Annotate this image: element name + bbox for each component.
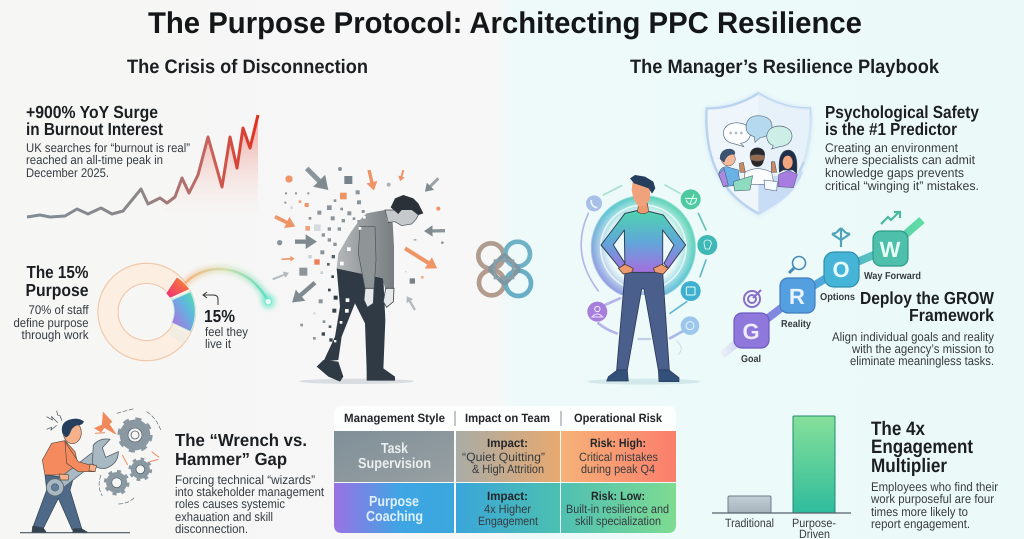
wrench description: disconnection. — [175, 522, 248, 536]
row: purpose coaching: Engagement — [478, 514, 539, 528]
burnout heading: in Burnout Interest — [26, 119, 163, 139]
figure shoes — [607, 370, 679, 382]
crumbling fragments over shoulders — [345, 209, 374, 234]
bar: traditional — [728, 496, 771, 513]
speech bubbles — [723, 116, 792, 149]
GROW description: Align individual goals and reality — [832, 330, 995, 344]
icon: central interlocking knot — [478, 242, 531, 296]
figure front arm — [358, 227, 376, 288]
burnout description: UK searches for “burnout is real” — [26, 141, 190, 155]
growth ribbon — [722, 220, 922, 355]
step: O options: O — [832, 257, 850, 282]
15% stat: 15% — [204, 306, 235, 326]
bar labels: Purpose- — [792, 516, 836, 530]
step: W way forward: W — [880, 237, 901, 262]
ground shadow — [299, 379, 414, 384]
ground shadow — [587, 379, 701, 385]
GROW heading: Framework — [909, 305, 994, 325]
engagement description: times more likely to — [871, 505, 968, 519]
purpose description — [14, 303, 89, 342]
figure shoes — [317, 360, 395, 382]
sparks — [95, 413, 159, 465]
wrench heading — [175, 430, 307, 469]
step: G goal: G — [742, 319, 760, 344]
panel: 15% purpose — [14, 262, 276, 351]
row: purpose coaching: Coaching — [366, 509, 423, 525]
row: task supervision: & High Attrition — [472, 462, 544, 476]
icon: target — [744, 290, 761, 307]
row: purpose coaching: Built-in resilience and — [566, 502, 669, 516]
safety description: where specialists can admit — [824, 153, 976, 167]
heading: left column: The Crisis of Disconnection — [127, 56, 368, 78]
heading: right column: The Manager’s Resilience Playbook — [630, 56, 939, 78]
GROW heading — [860, 288, 994, 325]
row: purpose coaching: skill specialization — [575, 514, 661, 528]
panel: 4x engagement — [712, 416, 998, 539]
wrench heading: Hammer” Gap — [175, 449, 287, 469]
step: O options — [824, 252, 859, 287]
safety description: Creating an environment — [825, 141, 959, 155]
purpose description: through work — [22, 328, 89, 342]
row: task supervision: “Quiet Quitting” — [462, 450, 545, 464]
purpose description: 70% of staff — [28, 303, 89, 317]
figure legs — [617, 272, 669, 370]
panel: burnout surge — [26, 102, 258, 217]
panel: psychological safety — [706, 92, 979, 215]
purpose heading: The 15% — [26, 262, 89, 282]
legs — [33, 475, 82, 530]
burnout description — [26, 141, 190, 180]
panel: wrench vs hammer — [20, 408, 324, 536]
step labels: Goal — [741, 354, 761, 365]
engagement description — [870, 480, 998, 531]
row: purpose coaching: Risk: Low: — [591, 489, 645, 503]
wrench description: into stakeholder management — [175, 485, 324, 499]
table header: Impact on Team — [465, 411, 550, 425]
burnout description: December 2025. — [26, 166, 109, 180]
figure neck and face — [385, 208, 418, 226]
step: W way forward — [873, 231, 908, 266]
stat caption — [205, 325, 249, 351]
burnout description: reached an all-time peak in — [26, 153, 163, 167]
bar labels: Traditional — [725, 516, 774, 530]
GROW description — [832, 330, 995, 368]
safety heading: is the #1 Predictor — [825, 119, 957, 139]
ground line — [20, 531, 130, 534]
table header — [334, 406, 676, 440]
row: task supervision: Impact: — [487, 436, 528, 450]
engagement heading: The 4x — [871, 418, 925, 440]
engagement heading: Engagement — [871, 436, 973, 458]
step labels — [741, 271, 921, 365]
figure torso — [337, 210, 394, 288]
small return arrow — [203, 292, 218, 305]
wrench description: exhauation and skill — [175, 510, 273, 524]
illustration: frustrated specialist with wrench and gears — [20, 408, 161, 533]
step: R reality — [780, 278, 815, 313]
stat caption: live it — [205, 337, 231, 351]
safety heading: Psychological Safety — [825, 102, 979, 122]
figure neck — [637, 203, 649, 214]
step labels: Options — [820, 292, 855, 303]
pixel fragments — [277, 167, 444, 342]
wrench description: roles causes systemic — [175, 497, 285, 511]
row: purpose coaching: Impact: — [487, 489, 528, 503]
engagement description: work purposeful are four — [870, 492, 994, 506]
hair — [62, 419, 84, 437]
stress lightning marks — [47, 411, 62, 430]
figure hands — [618, 264, 668, 274]
figure head — [632, 182, 650, 207]
icon: magnifier — [789, 256, 806, 273]
row: task supervision: Supervision — [358, 456, 431, 472]
row: purpose coaching: Purpose — [369, 494, 419, 510]
row: task supervision: Task — [381, 441, 409, 457]
icon: branching arrows — [832, 228, 850, 247]
row: task supervision: Risk: High: — [590, 436, 646, 450]
table header: Operational Risk — [574, 411, 662, 425]
torso — [42, 441, 78, 475]
burnout heading — [26, 102, 163, 139]
purpose heading — [26, 262, 89, 300]
engagement heading — [871, 418, 973, 477]
step: R reality: R — [789, 284, 805, 309]
row: purpose coaching: 4x Higher — [484, 502, 531, 516]
donut chart — [108, 273, 195, 351]
table header: Management Style — [344, 411, 445, 425]
row: task supervision: during peak Q4 — [581, 462, 655, 476]
GROW description: eliminate meaningless tasks. — [850, 354, 994, 368]
figure legs — [323, 268, 385, 370]
connector arc glow — [185, 269, 276, 309]
row: task supervision: Critical mistakes — [579, 450, 658, 464]
title: The Purpose Protocol: Architecting PPC Resilience — [148, 7, 862, 40]
figure hands — [364, 288, 394, 307]
GROW heading: Deploy the GROW — [860, 288, 994, 308]
safety description: knowledge gaps prevents — [825, 166, 964, 180]
row: purpose coaching — [334, 483, 676, 533]
orbit icons — [586, 189, 717, 335]
stress arrows — [273, 168, 445, 310]
shoes — [32, 526, 88, 532]
safety description: critical “winging it” mistakes. — [825, 179, 979, 193]
step labels: Reality — [781, 319, 811, 330]
icon: trend arrow — [881, 212, 900, 224]
arm and hands — [65, 442, 95, 472]
wrench — [46, 439, 118, 496]
icon: safety shield with team — [706, 92, 811, 215]
wrench description — [175, 473, 324, 536]
illustration: resilient manager with icon orbit — [581, 175, 717, 385]
comparison table — [334, 406, 676, 533]
bar chart — [712, 416, 851, 539]
safety description — [824, 141, 979, 193]
step labels: Way Forward — [864, 271, 921, 282]
gear motion arcs — [99, 408, 161, 504]
step: G goal — [734, 313, 769, 348]
GROW description: with the agency’s mission to — [851, 342, 994, 356]
purpose description: define purpose — [14, 316, 89, 330]
wrench description: Forcing technical “wizards” — [175, 473, 315, 487]
bar labels — [725, 516, 836, 539]
gears — [105, 419, 151, 494]
head — [63, 422, 81, 444]
burnout heading: +900% YoY Surge — [26, 102, 158, 122]
team members — [719, 148, 797, 191]
panel: GROW framework — [722, 212, 995, 368]
safety heading — [825, 102, 979, 139]
line chart: burnout searches — [27, 115, 258, 217]
row: task supervision — [334, 431, 676, 482]
orbit glow ring — [591, 195, 696, 300]
bar: purpose-driven — [793, 416, 835, 513]
stat caption: feel they — [205, 325, 249, 339]
wrench heading: The “Wrench vs. — [175, 430, 307, 450]
engagement heading: Multiplier — [871, 455, 947, 477]
purpose heading: Purpose — [26, 280, 89, 300]
engagement description: Employees who find their — [871, 480, 998, 494]
figure hair — [630, 175, 655, 194]
engagement description: report engagement. — [871, 517, 970, 531]
figure torso and arms — [601, 211, 686, 272]
illustration: disintegrating burned-out figure — [273, 167, 445, 384]
figure hair — [391, 195, 423, 215]
orbit arcs — [581, 185, 706, 354]
